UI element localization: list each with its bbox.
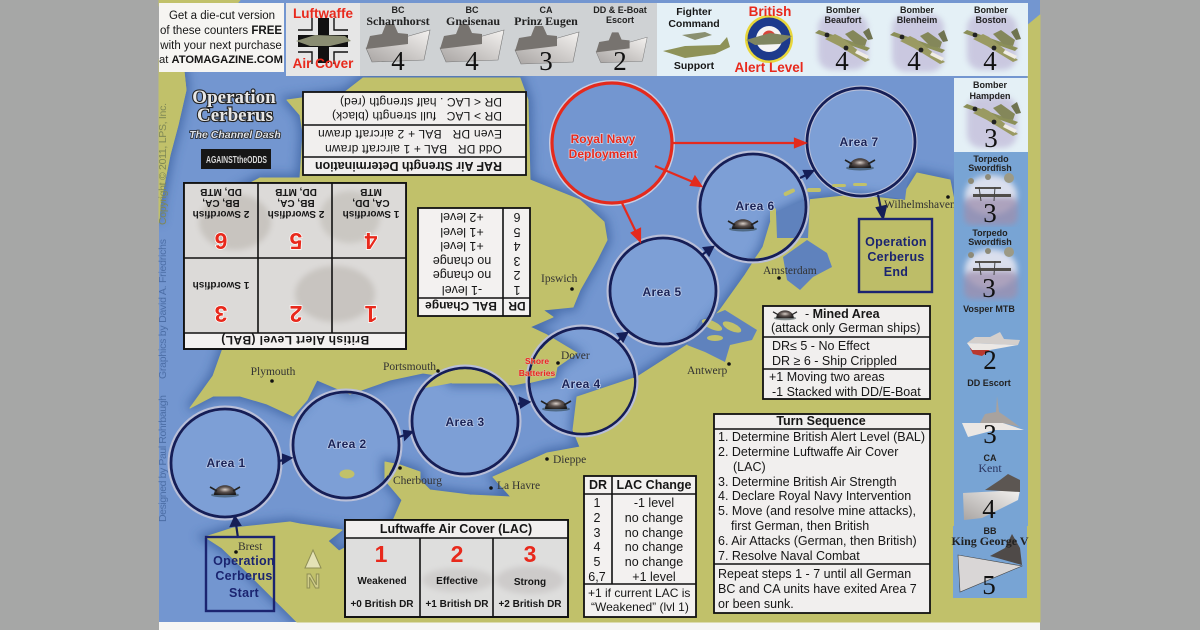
panel: british alert level table: MTB [360,186,382,197]
mines [210,158,875,498]
counter: scharnhorst: 4 [391,46,405,76]
counter: scharnhorst: BC [392,5,405,15]
panel: LAC change table: “Weakened” (lvl 1) [591,600,689,614]
counter: DD escort: DD Escort [967,378,1011,388]
panel: LAC change table: 6,7 [588,570,606,584]
panel: advert: at ATOMAGAZINE.COM [159,54,283,66]
area labels: Area 5 [642,285,682,299]
counter: blenheim: Bomber [900,5,934,15]
panel: british alert level table: 4 [364,228,377,254]
area labels: Area 1 [206,456,246,470]
arrows: route [231,171,886,538]
panel: LAC change table: +1 level [632,570,676,584]
panel: mined area: +1 Moving two areas [769,370,885,384]
logo: against the odds: AGAINSTtheODDS [206,154,267,166]
counter: beaufort [805,3,880,76]
panel: turn sequence: (LAC) [733,460,766,474]
panel: BAL change table: 5 [513,225,520,239]
counter: escort [583,3,657,76]
counter: escort: 2 [613,46,627,76]
panel: british alert level table: 1 [364,301,377,327]
counter: gneisenau [434,3,509,76]
panel: BAL change table: BAL Change [425,299,497,313]
counter: luftwaffe air cover: Luftwaffe [293,6,353,21]
panel: turn sequence: 3. Determine British Air Strength [718,475,897,489]
panel: BAL change table: 6 [513,210,520,224]
panel: advert: of these counters FREE [160,25,282,37]
counter: prinz eugen: Prinz Eugen [514,14,578,28]
panel: turn sequence: Turn Sequence [776,414,866,428]
counter: swordfish 1 [954,152,1028,228]
place names: Plymouth [251,366,296,378]
panel: turn sequence [714,414,930,613]
panel: BAL change table: DR [508,299,526,313]
counter: beaufort: Beaufort [824,15,862,25]
panel: LAC change table: no change [625,526,683,540]
counter: boston [954,3,1028,76]
panel: mined area [763,306,930,399]
counter: hampden: 3 [984,123,998,153]
panel: british alert level table: 2 Swordfish [268,208,324,219]
panel: royal navy deployment: Deployment [569,147,637,161]
area labels: Area 7 [839,135,879,149]
panel: BAL change table: -1 level [442,283,482,297]
panel: turn sequence: 5. Move (and resolve mine attacks), [718,504,916,518]
shore batteries label [519,356,555,378]
panel: british alert level table: 1 Swordfish [343,208,399,219]
place names [234,195,956,554]
panel: BAL change table: +1 level [440,239,484,253]
panel: british alert level table: DD, MTB [275,186,317,197]
title [189,87,281,141]
title: Operation [192,87,276,108]
panel: luftwaffe air cover table: +0 British DR [350,599,414,610]
counter: prinz eugen: 3 [539,46,553,76]
credits: Graphics by David A. Friedrichs [157,239,169,379]
panel: LAC change table: DR [589,478,607,492]
panel: luftwaffe air cover table: Strong [514,577,546,588]
panel: british alert level table: 6 [215,228,227,254]
panel: BAL change table: 1 [513,283,520,297]
place names: Brest [238,541,263,553]
panel: LAC change table: no change [625,555,683,569]
panel: british alert level table: CA, DD, [352,197,390,208]
panel: luftwaffe air cover table: +1 British DR [425,599,489,610]
panel: luftwaffe air cover table [345,520,568,617]
IJsselmeer and Zeeland waters [687,176,908,362]
counter: king george v: BB [984,526,997,536]
panel: BAL change table: +1 level [440,225,484,239]
panel: BAL change table: 3 [513,254,520,268]
area labels [206,135,879,470]
counter: kent: Kent [978,461,1002,475]
panel: advert: Get a die-cut version [169,10,275,22]
panel: british alert level table: 5 [289,228,302,254]
counter: fighter command: Fighter [676,6,712,18]
panel: british alert level table: 2 [290,301,302,327]
panel: turn sequence: 2. Determine Luftwaffe Air Cover [718,445,898,459]
panel: LAC change table: 2 [594,511,601,525]
counter: kent: 4 [982,494,996,524]
panel: BAL change table [418,208,530,316]
panel: LAC change table: no change [625,540,683,554]
panel: mined area: - Mined Area [805,307,881,321]
counter: swordfish 1: Swordfish [968,163,1012,173]
panel: LAC change table: 5 [594,555,601,569]
panel: advert [159,3,284,72]
box: operation cerberus end: Cerberus [867,250,925,264]
counter: scharnhorst [360,3,434,76]
counter: blenheim: Blenheim [897,15,937,25]
counter: gneisenau: 4 [465,46,479,76]
counter: swordfish 1: 3 [983,198,997,228]
panel: luftwaffe air cover table: Effective [436,576,478,587]
counter: swordfish 1: Torpedo [973,154,1009,164]
panel: advert: with your next purchase [159,40,282,52]
counter: king george v: King George V [951,534,1029,548]
credits: Designed by Paul Rohrbaugh [157,395,169,522]
panel: turn sequence: 7. Resolve Naval Combat [718,549,860,563]
area labels: Area 6 [735,199,775,213]
box: operation cerberus end: End [884,265,908,279]
panel: british alert level table: 1 Swordfish [193,279,249,290]
panel: LAC change table: 1 [594,496,601,510]
panel: LAC change table: LAC Change [616,478,692,492]
counter: fighter command: Support [674,60,715,72]
panel: turn sequence: BC and CA units have exited Area 7 [718,582,917,596]
counter: escort: DD & E-Boat [593,5,647,15]
title: The Channel Dash [189,129,281,141]
panel: LAC change table [584,476,696,617]
compass north [305,550,321,593]
arrows: royal navy [622,139,805,241]
panel: british alert level table: DD, MTB [200,186,242,197]
logo: against the odds [201,149,271,169]
panel: turn sequence: or been sunk. [718,597,794,611]
panel: luftwaffe air cover table: Weakened [357,576,407,587]
counter: king george v: 5 [982,570,996,600]
counter: swordfish 2: 3 [982,273,996,303]
place names: Cherbourg [393,475,442,487]
place names: Dieppe [553,454,586,466]
panel: turn sequence: 4. Declare Royal Navy Intervention [718,489,911,503]
place names: Wilhelmshaven [884,199,956,211]
panel: RAF air strength determination: RAF Air Strength Determination [315,159,502,173]
panel: LAC change table: 4 [594,540,601,554]
counter: fighter command [657,3,731,76]
counter: luftwaffe air cover [286,3,360,76]
area circles [170,88,915,518]
panel: mined area: DR≤ 5 - No Effect [772,339,870,353]
counter: prinz eugen: CA [540,5,553,15]
place names: Dover [561,350,590,362]
compass north: N [306,571,320,593]
place names: Antwerp [687,365,727,377]
counter: prinz eugen [509,3,583,76]
counter: swordfish 2 [954,227,1028,303]
panel: map [159,0,1040,630]
counter: vosper MTB: 2 [983,345,997,375]
panel: royal navy deployment [551,82,673,204]
panel: mined area: -1 Stacked with DD/E-Boat [772,385,921,399]
counter: boston: Boston [976,15,1006,25]
counter: beaufort: Bomber [826,5,860,15]
panel: LAC change table: -1 level [634,496,674,510]
panel: BAL change table: no change [433,268,491,282]
panel: luftwaffe air cover table: 3 [524,541,536,567]
counter: blenheim: 4 [907,46,921,76]
panel: turn sequence: 1. Determine British Alert Level (BAL) [718,430,925,444]
panel: RAF air strength determination: DR < LAC . half strength (red) [340,95,502,109]
panel: LAC change table: +1 if current LAC is [588,586,690,600]
counter: hampden: Hampden [969,91,1011,101]
counter: escort: Escort [606,15,634,25]
place names: Amsterdam [763,265,817,277]
area labels: Area 2 [327,437,367,451]
panel: LAC change table: 3 [594,526,601,540]
counter: hampden: Bomber [973,80,1007,90]
box: operation cerberus start [206,537,275,611]
counter: DD escort: 3 [983,419,997,449]
box: operation cerberus start: Start [229,586,260,600]
panel: british alert level table: British Alert Level (BAL) [221,333,369,347]
area labels: Area 4 [561,377,601,391]
panel: turn sequence: first German, then British [731,519,869,533]
credits [157,103,169,522]
panel: turn sequence: Repeat steps 1 - 7 until all German [718,567,911,581]
counter: kent: CA [984,453,997,463]
counter: DD escort [954,376,1028,451]
panel: luftwaffe air cover table: 1 [375,541,388,567]
counter: swordfish 2: Swordfish [968,237,1012,247]
counter: fighter command: Command [668,18,720,30]
land seen inside area circles [385,183,867,476]
box: operation cerberus end: Operation [865,235,927,249]
title: Cerberus [197,105,273,126]
panel: RAF air strength determination: Odd DR BAL + 1 aircraft drawn [325,142,502,156]
area labels: Area 3 [445,415,485,429]
panel: BAL change table: 4 [513,239,520,253]
panel: BAL change table: 2 [513,268,520,282]
panel: luftwaffe air cover table: +2 British DR [498,599,562,610]
panel: RAF air strength determination: DR > LAC full strength (black) [332,109,502,123]
place names: Ipswich [541,273,578,285]
place names: La Havre [497,480,540,492]
counter: gneisenau: Gneisenau [446,14,500,28]
counter: swordfish 2: Torpedo [972,228,1008,238]
counter: beaufort: 4 [835,46,849,76]
counter: gneisenau: BC [466,5,479,15]
counter: boston: Bomber [974,5,1008,15]
counter: hampden [954,78,1028,153]
panel: turn sequence: 6. Air Attacks (German, then British) [718,534,917,548]
counter: vosper MTB [954,302,1028,376]
counter: blenheim [880,3,954,76]
counter: british alert level: British [749,4,791,19]
panel: mined area: (attack only German ships) [771,321,920,335]
panel: BAL change table: +2 level [440,210,484,224]
panel: british alert level table: BB, CA, [277,197,315,208]
counter: british alert level [731,3,805,76]
panel: british alert level table: 3 [215,301,227,327]
counter: luftwaffe air cover: Air Cover [293,56,354,71]
counter: vosper MTB: Vosper MTB [963,304,1015,314]
panel: british alert level table: BB, CA, [202,197,240,208]
shore batteries label: Batteries [519,368,555,378]
counter: british alert level: Alert Level [734,60,804,75]
place names: Portsmouth [383,361,436,373]
panel: RAF air strength determination: Even DR BAL + 2 aircraft drawn [318,127,502,141]
panel: british alert level table: 2 Swordfish [193,208,249,219]
panel: royal navy deployment: Royal Navy [571,132,636,146]
shore batteries label: Shore [525,356,549,366]
panel: BAL change table: no change [433,254,491,268]
panel: luftwaffe air cover table: 2 [451,541,463,567]
counter: scharnhorst: Scharnhorst [366,14,430,28]
counter: boston: 4 [983,46,997,76]
box: operation cerberus start: Cerberus [215,569,273,583]
counter: kent [954,451,1028,526]
box: operation cerberus end [859,219,932,292]
panel: british alert level table [184,183,406,349]
credits: Copyright © 2011, LPS, Inc. [157,103,169,225]
counter: king george v [951,526,1029,600]
panel: RAF air strength determination [303,92,526,175]
box: operation cerberus start: Operation [213,554,275,568]
panel: mined area: DR ≥ 6 - Ship Crippled [772,354,897,368]
panel: LAC change table: no change [625,511,683,525]
panel: luftwaffe air cover table: Luftwaffe Air Cover (LAC) [380,522,532,536]
